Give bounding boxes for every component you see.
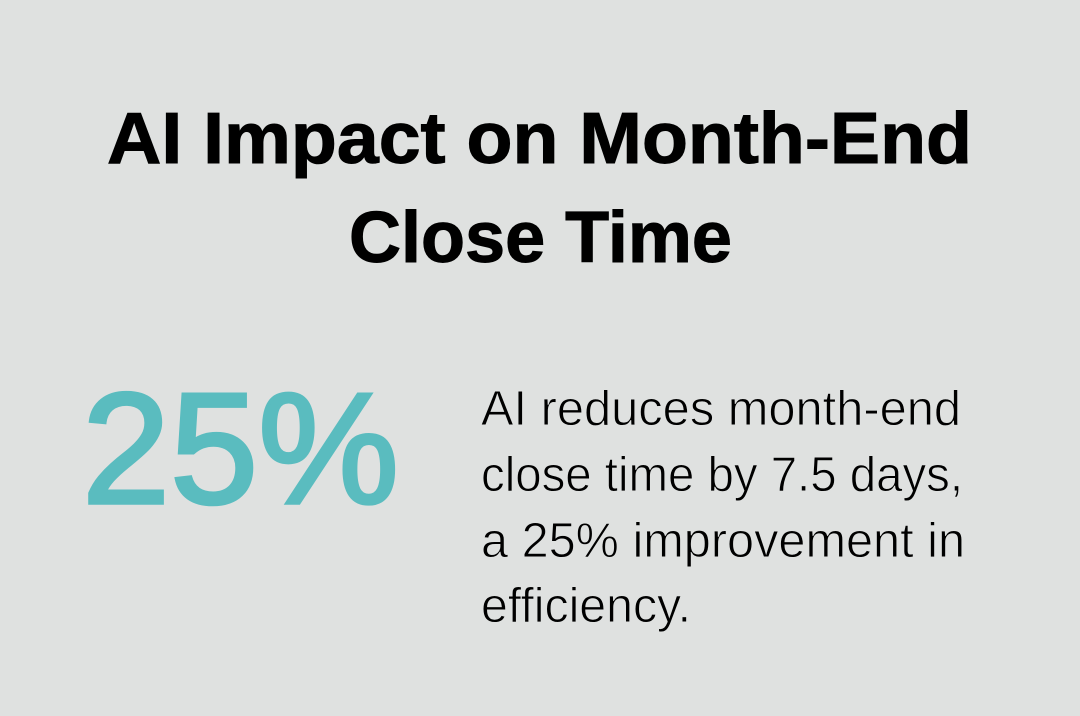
title: AI Impact on Month-End [107, 99, 972, 179]
description text: efficiency. [481, 579, 691, 633]
title [107, 99, 972, 278]
description text: close time by 7.5 days, [481, 448, 963, 502]
big statistic: 25%: 25% [82, 361, 399, 537]
title: Close Time [349, 198, 732, 278]
description text: a 25% improvement in [481, 514, 965, 568]
description text: AI reduces month-end [481, 382, 961, 436]
description text [481, 382, 965, 633]
